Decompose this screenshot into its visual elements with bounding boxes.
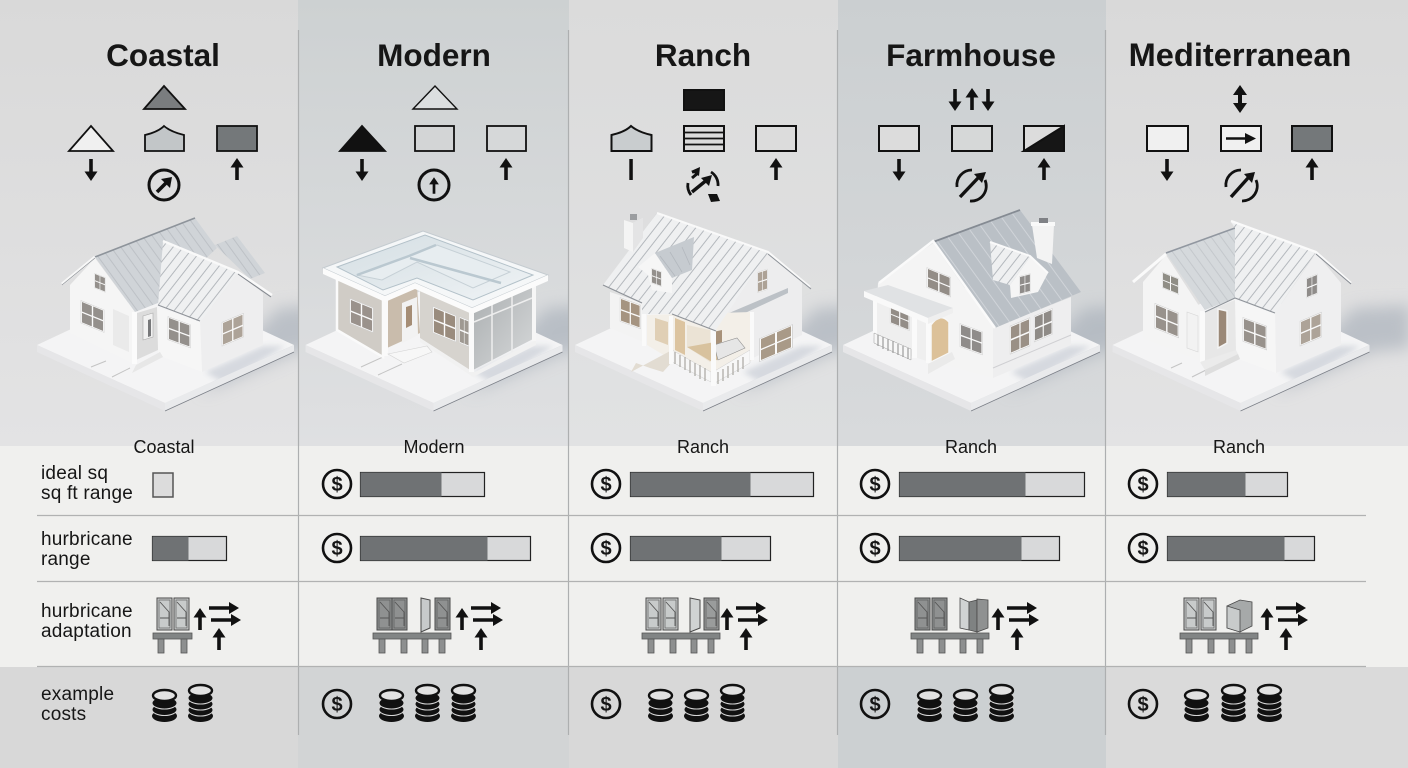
- label: ideal sq ft range: sq ft range: [41, 483, 133, 504]
- adaptation icon: [373, 598, 503, 653]
- heading: Farmhouse: Farmhouse: [886, 37, 1056, 73]
- dollar icon row 1: [592, 470, 620, 498]
- dollar icon row 1: $: [331, 474, 343, 496]
- label: hurricane adaptation: hurbricane: [41, 601, 133, 622]
- dollar icon row 4: [861, 690, 889, 718]
- square footage bar: [360, 472, 484, 496]
- dollar icon row 4: $: [1137, 694, 1149, 716]
- heading: Coastal: Coastal: [106, 37, 220, 73]
- cost coins: [1184, 685, 1282, 722]
- dollar icon row 2: [861, 534, 889, 562]
- adaptation icon: [153, 598, 241, 653]
- roof and shape icons: Coastal: [69, 86, 257, 200]
- dollar icon row 1: $: [869, 474, 881, 496]
- label: example costs: example: [41, 684, 114, 705]
- roof and shape icons: Mediterranean: [1147, 85, 1332, 201]
- adaptation icon: [911, 598, 1039, 653]
- dollar icon row 1: $: [1137, 474, 1149, 496]
- label: ideal sq ft range: ideal sq: [41, 463, 108, 484]
- label: example costs: costs: [41, 704, 86, 725]
- square footage bar: [1168, 472, 1288, 496]
- square footage bar: [900, 472, 1084, 496]
- hurricane range bar: [630, 536, 770, 560]
- house: Mediterranean: [1112, 221, 1408, 411]
- house: Coastal: [38, 217, 298, 412]
- heading: Ranch: Ranch: [655, 37, 751, 73]
- style label: Modern: Modern: [403, 437, 465, 457]
- house: Ranch: [576, 212, 837, 412]
- dollar icon row 1: [323, 470, 351, 498]
- dollar icon row 2: [323, 534, 351, 562]
- cost coins: [152, 685, 213, 722]
- dollar icon row 2: $: [1137, 538, 1149, 560]
- dollar icon row 2: $: [331, 538, 343, 560]
- label: hurricane adaptation: adaptation: [41, 621, 132, 642]
- style label: Ranch: Ranch: [677, 437, 729, 457]
- panel: Ranch: [576, 43, 837, 722]
- dollar icon row 1: [861, 470, 889, 498]
- dollar icon row 2: [592, 534, 620, 562]
- label: hurricane range: hurbricane: [41, 529, 133, 550]
- roof and shape icons: Ranch: [612, 90, 796, 202]
- cost coins: [379, 685, 476, 722]
- panel: Modern: [306, 43, 568, 722]
- dollar icon row 4: $: [600, 694, 612, 716]
- city label: Coastal: Coastal: [133, 437, 195, 457]
- style label: Farmhouse: Ranch: [945, 437, 997, 457]
- adaptation icon: [1180, 598, 1308, 653]
- dollar icon row 1: $: [600, 474, 612, 496]
- row labels: [41, 463, 133, 725]
- dollar icon row 4: $: [869, 694, 881, 716]
- dollar icon row 4: [1129, 690, 1157, 718]
- roof and shape icons: Modern: [340, 86, 526, 200]
- panel: Farmhouse: [843, 43, 1105, 722]
- label: hurricane range: range: [41, 549, 91, 570]
- dollar icon row 2: $: [600, 538, 612, 560]
- hurricane range bar: [1168, 536, 1314, 560]
- hurricane range bar: [900, 536, 1060, 560]
- heading: Modern: Modern: [377, 37, 491, 73]
- style label: Mediterranean: Ranch: [1213, 437, 1265, 457]
- house: Farmhouse: [843, 209, 1105, 412]
- square footage swatch: [153, 473, 173, 497]
- dollar icon row 4: [592, 690, 620, 718]
- hurricane range bar: [152, 536, 226, 560]
- dollar icon row 2: $: [869, 538, 881, 560]
- square footage bar: [630, 472, 814, 496]
- house: Modern: [306, 230, 568, 412]
- panel: Mediterranean: [1112, 36, 1408, 722]
- heading: Mediterranean: Mediterranean: [1129, 36, 1351, 73]
- panel: Coastal: [38, 43, 298, 722]
- cost coins: [917, 685, 1014, 722]
- dollar icon row 4: [323, 690, 351, 718]
- dollar icon row 4: $: [331, 694, 343, 716]
- cost coins: [648, 685, 745, 722]
- roof and shape icons: Farmhouse: [879, 88, 1064, 201]
- dollar icon row 2: [1129, 534, 1157, 562]
- dollar icon row 1: [1129, 470, 1157, 498]
- hurricane range bar: [360, 536, 530, 560]
- adaptation icon: [642, 598, 768, 653]
